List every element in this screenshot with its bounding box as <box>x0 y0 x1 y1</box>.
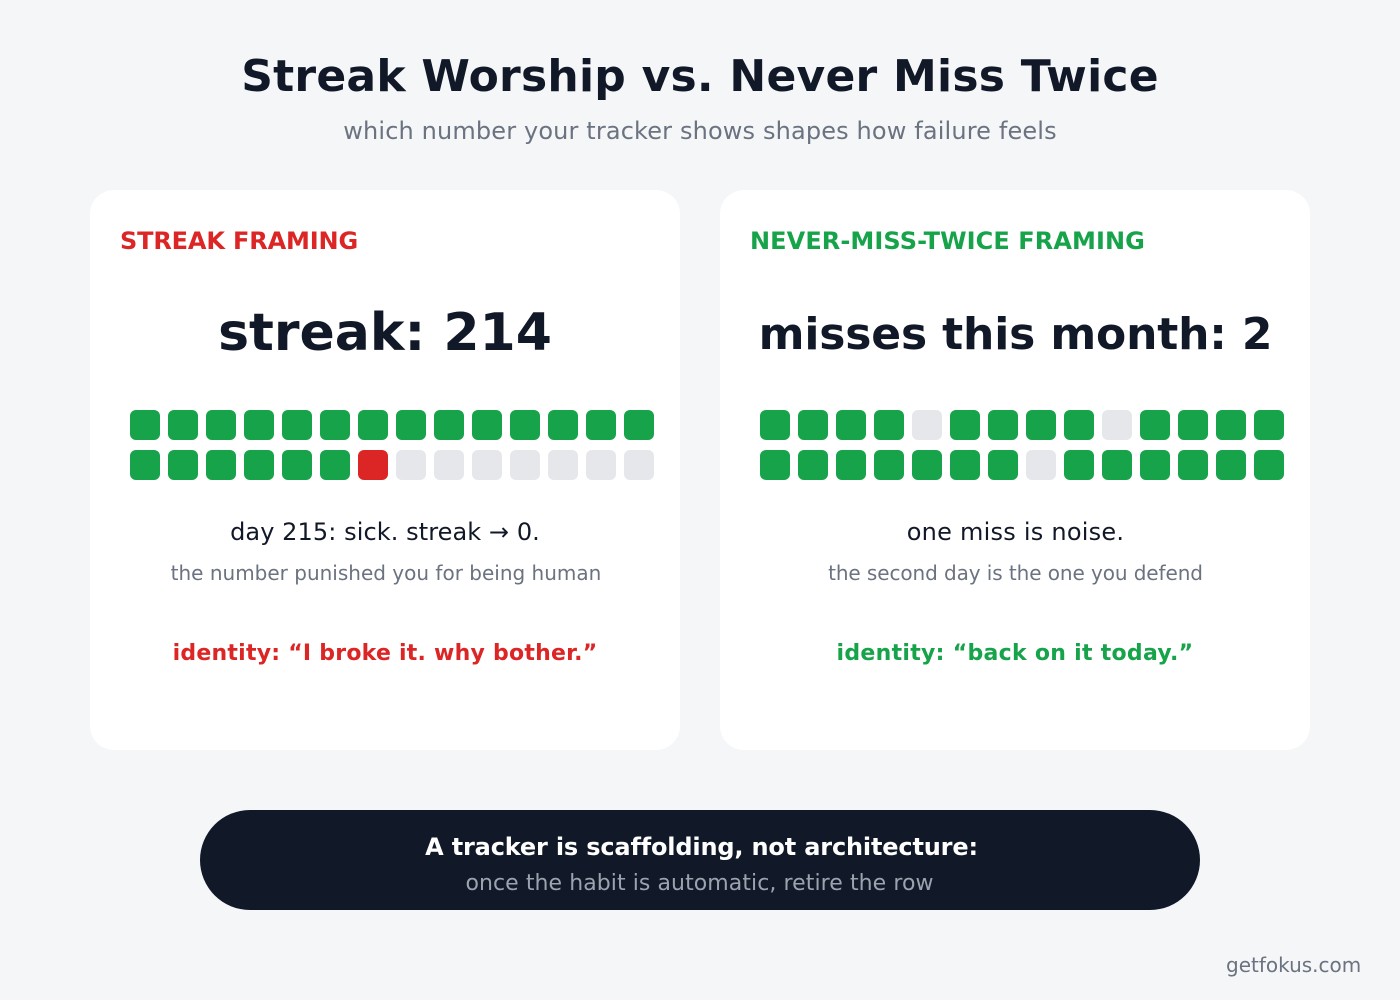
big number: streak: 214 <box>218 303 552 363</box>
subtitle: which number your tracker shows shapes how failure feels <box>343 117 1057 145</box>
banner headline: A tracker is scaffolding, not architecture: <box>425 833 978 861</box>
identity quote: identity: “I broke it. why bother.” <box>173 641 597 666</box>
statement: day 215: sick. streak → 0. <box>230 518 540 546</box>
explanation: the second day is the one you defend <box>828 561 1203 585</box>
statement: one miss is noise. <box>907 518 1124 546</box>
big number: misses this month: 2 <box>759 309 1272 360</box>
panel: never-miss-twice framing <box>720 190 1310 750</box>
explanation: the number punished you for being human <box>171 561 601 585</box>
panel heading: STREAK FRAMING <box>120 227 358 255</box>
identity quote: identity: “back on it today.” <box>837 641 1193 666</box>
panel: streak framing <box>90 190 680 750</box>
day grid <box>760 410 1284 480</box>
banner subline: once the habit is automatic, retire the row <box>465 871 934 896</box>
day grid <box>130 410 654 480</box>
title: Streak Worship vs. Never Miss Twice <box>241 51 1159 102</box>
footer credit: getfokus.com <box>1226 953 1361 977</box>
panel heading: NEVER-MISS-TWICE FRAMING <box>750 227 1145 255</box>
takeaway banner <box>200 810 1200 910</box>
